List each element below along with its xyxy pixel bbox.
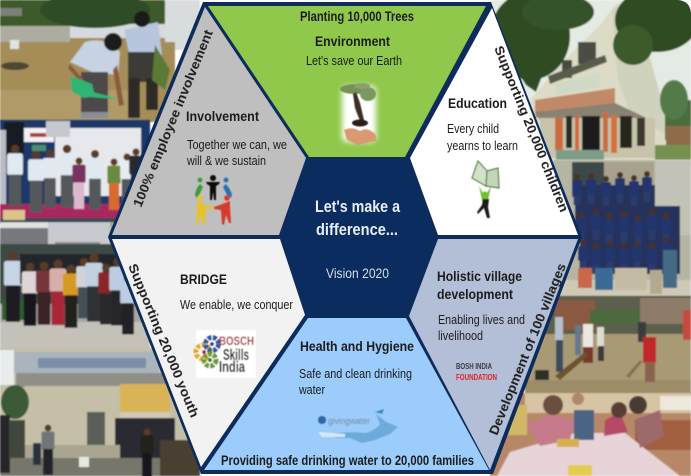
heading: education: Education <box>448 95 507 111</box>
logo: bosh india foundation <box>456 362 497 382</box>
text: village body <box>438 313 525 343</box>
photo: BRIDGE youth group <box>0 222 150 350</box>
text: health body: water <box>298 383 325 397</box>
text: health body: Safe and clean drinking <box>299 367 412 381</box>
panel: environment <box>208 6 486 157</box>
heading: holistic village: development <box>437 286 513 302</box>
text: development of 100 villages: Development of 100 villages <box>486 261 569 437</box>
panel: centre vision <box>282 160 435 315</box>
text: involvement body: Together we can, we <box>187 138 287 152</box>
photo: school children <box>553 160 691 298</box>
heading: holistic village <box>437 268 522 302</box>
photo corner <box>678 0 691 13</box>
heading: health and hygiene: Health and Hygiene <box>300 338 414 354</box>
heading: bridge: BRIDGE <box>180 271 227 287</box>
logo: giving water <box>318 409 398 443</box>
panel: bridge <box>112 239 305 467</box>
photo: village clean-up <box>525 296 691 396</box>
text: education body: yearns to learn <box>447 139 518 153</box>
text: safe water target: Providing safe drinking water to 20,000 families <box>221 453 474 468</box>
text: vision 2020: Vision 2020 <box>326 266 389 281</box>
logo: giving water: givingwater <box>328 416 370 427</box>
logo: bosch skills india: BOSCH <box>219 334 254 348</box>
hexagon frame <box>108 2 582 474</box>
text: health body <box>298 367 412 397</box>
photo: health check <box>490 393 691 476</box>
icon: book and reader <box>472 161 499 218</box>
text: 100% employee involvement: 100% employee involvement <box>130 27 216 209</box>
logo: bosch skills india: Skills <box>223 347 249 364</box>
text: involvement body <box>186 138 287 168</box>
logo: bosch skills india <box>196 330 256 378</box>
text: supporting 20,000 youth: Supporting 20,000 youth <box>125 261 202 420</box>
photo: tree planting <box>0 0 200 122</box>
heading: let's make a difference: Let's make a <box>315 198 401 216</box>
icon: tree in hands <box>340 83 376 145</box>
text: education body: Every child <box>447 122 499 136</box>
text: involvement body: will & we sustain <box>186 154 266 168</box>
logo: bosh india foundation: FOUNDATION <box>456 373 497 382</box>
heading: environment: Environment <box>315 33 390 49</box>
heading: let's make a difference <box>315 198 401 239</box>
panel: involvement <box>112 7 306 235</box>
heading: holistic village: Holistic village <box>437 268 522 284</box>
text: environment body: Let's save our Earth <box>306 54 402 68</box>
logo: bosh india foundation: BOSH INDIA <box>456 362 492 371</box>
photo: knowledge centre building <box>490 0 691 165</box>
panel: health and hygiene <box>204 318 489 470</box>
photo: staff group <box>0 120 150 224</box>
heading: involvement: Involvement <box>186 108 259 124</box>
text: supporting 20,000 children: Supporting 20,000 children <box>491 44 572 214</box>
text: planting trees: Planting 10,000 Trees <box>300 9 414 24</box>
icon: circle of people <box>195 175 232 225</box>
panel: education <box>410 8 578 235</box>
text: bridge body: We enable, we conquer <box>180 298 293 312</box>
logo: bosch skills india: India <box>219 359 245 376</box>
text: education body <box>447 122 518 153</box>
heading: let's make a difference: difference... <box>316 221 398 239</box>
photo: water centre building <box>0 348 200 476</box>
text: village body: livelihood <box>438 329 483 343</box>
panel: holistic village <box>409 239 578 470</box>
text: village body: Enabling lives and <box>438 313 525 327</box>
